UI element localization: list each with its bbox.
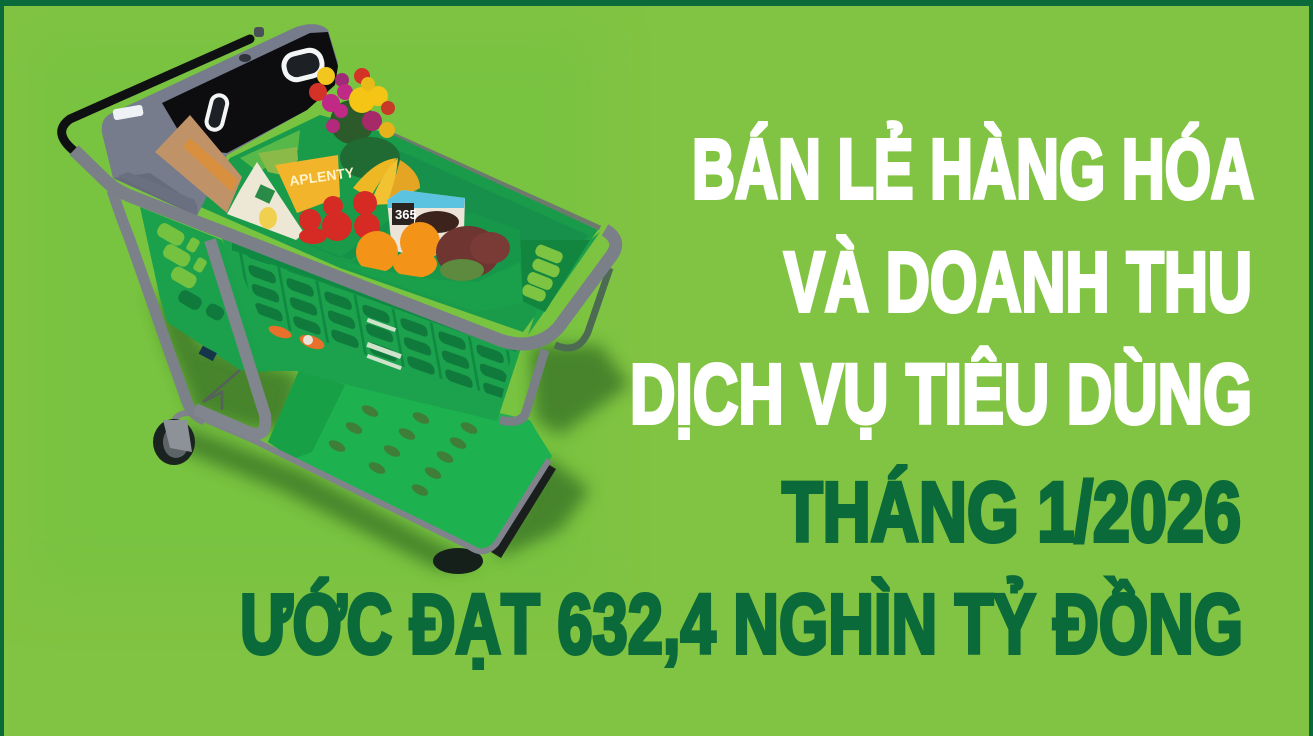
right bag <box>352 213 523 312</box>
handle <box>62 39 250 150</box>
paper bag with bread <box>155 115 242 213</box>
subtitle <box>240 465 1243 671</box>
upper basket <box>196 115 610 335</box>
tomato bag <box>297 218 392 260</box>
bananas <box>353 158 420 205</box>
items seen through basket <box>267 318 402 370</box>
black bumper <box>491 463 556 558</box>
tomatoes <box>299 191 380 244</box>
rear post right <box>555 268 610 348</box>
wire rack <box>203 370 240 410</box>
cart shadow <box>150 290 630 570</box>
white snack bag <box>227 162 304 240</box>
kale <box>340 137 400 179</box>
right post <box>500 350 545 421</box>
chocolate cookie box: 365 <box>395 207 417 222</box>
scanner device <box>102 24 338 216</box>
rear wheel <box>433 548 483 574</box>
yellow box: APLENTY <box>288 164 356 189</box>
lettuce <box>436 226 510 281</box>
basket left side <box>140 207 267 372</box>
yellow box <box>275 155 356 213</box>
shopping cart <box>62 24 616 574</box>
rear post left <box>112 190 205 420</box>
lower platform <box>268 368 552 552</box>
celery <box>258 147 298 175</box>
front wheel <box>153 419 195 465</box>
title <box>630 122 1254 441</box>
front bag wrap <box>342 262 523 312</box>
top front rail <box>74 150 616 344</box>
front post <box>195 240 265 434</box>
flowers <box>309 67 395 144</box>
back rail <box>393 135 600 228</box>
oranges <box>356 222 440 278</box>
basket front face with slots <box>222 238 522 421</box>
chocolate cookie box <box>387 190 465 260</box>
lower frame rail <box>172 413 549 551</box>
